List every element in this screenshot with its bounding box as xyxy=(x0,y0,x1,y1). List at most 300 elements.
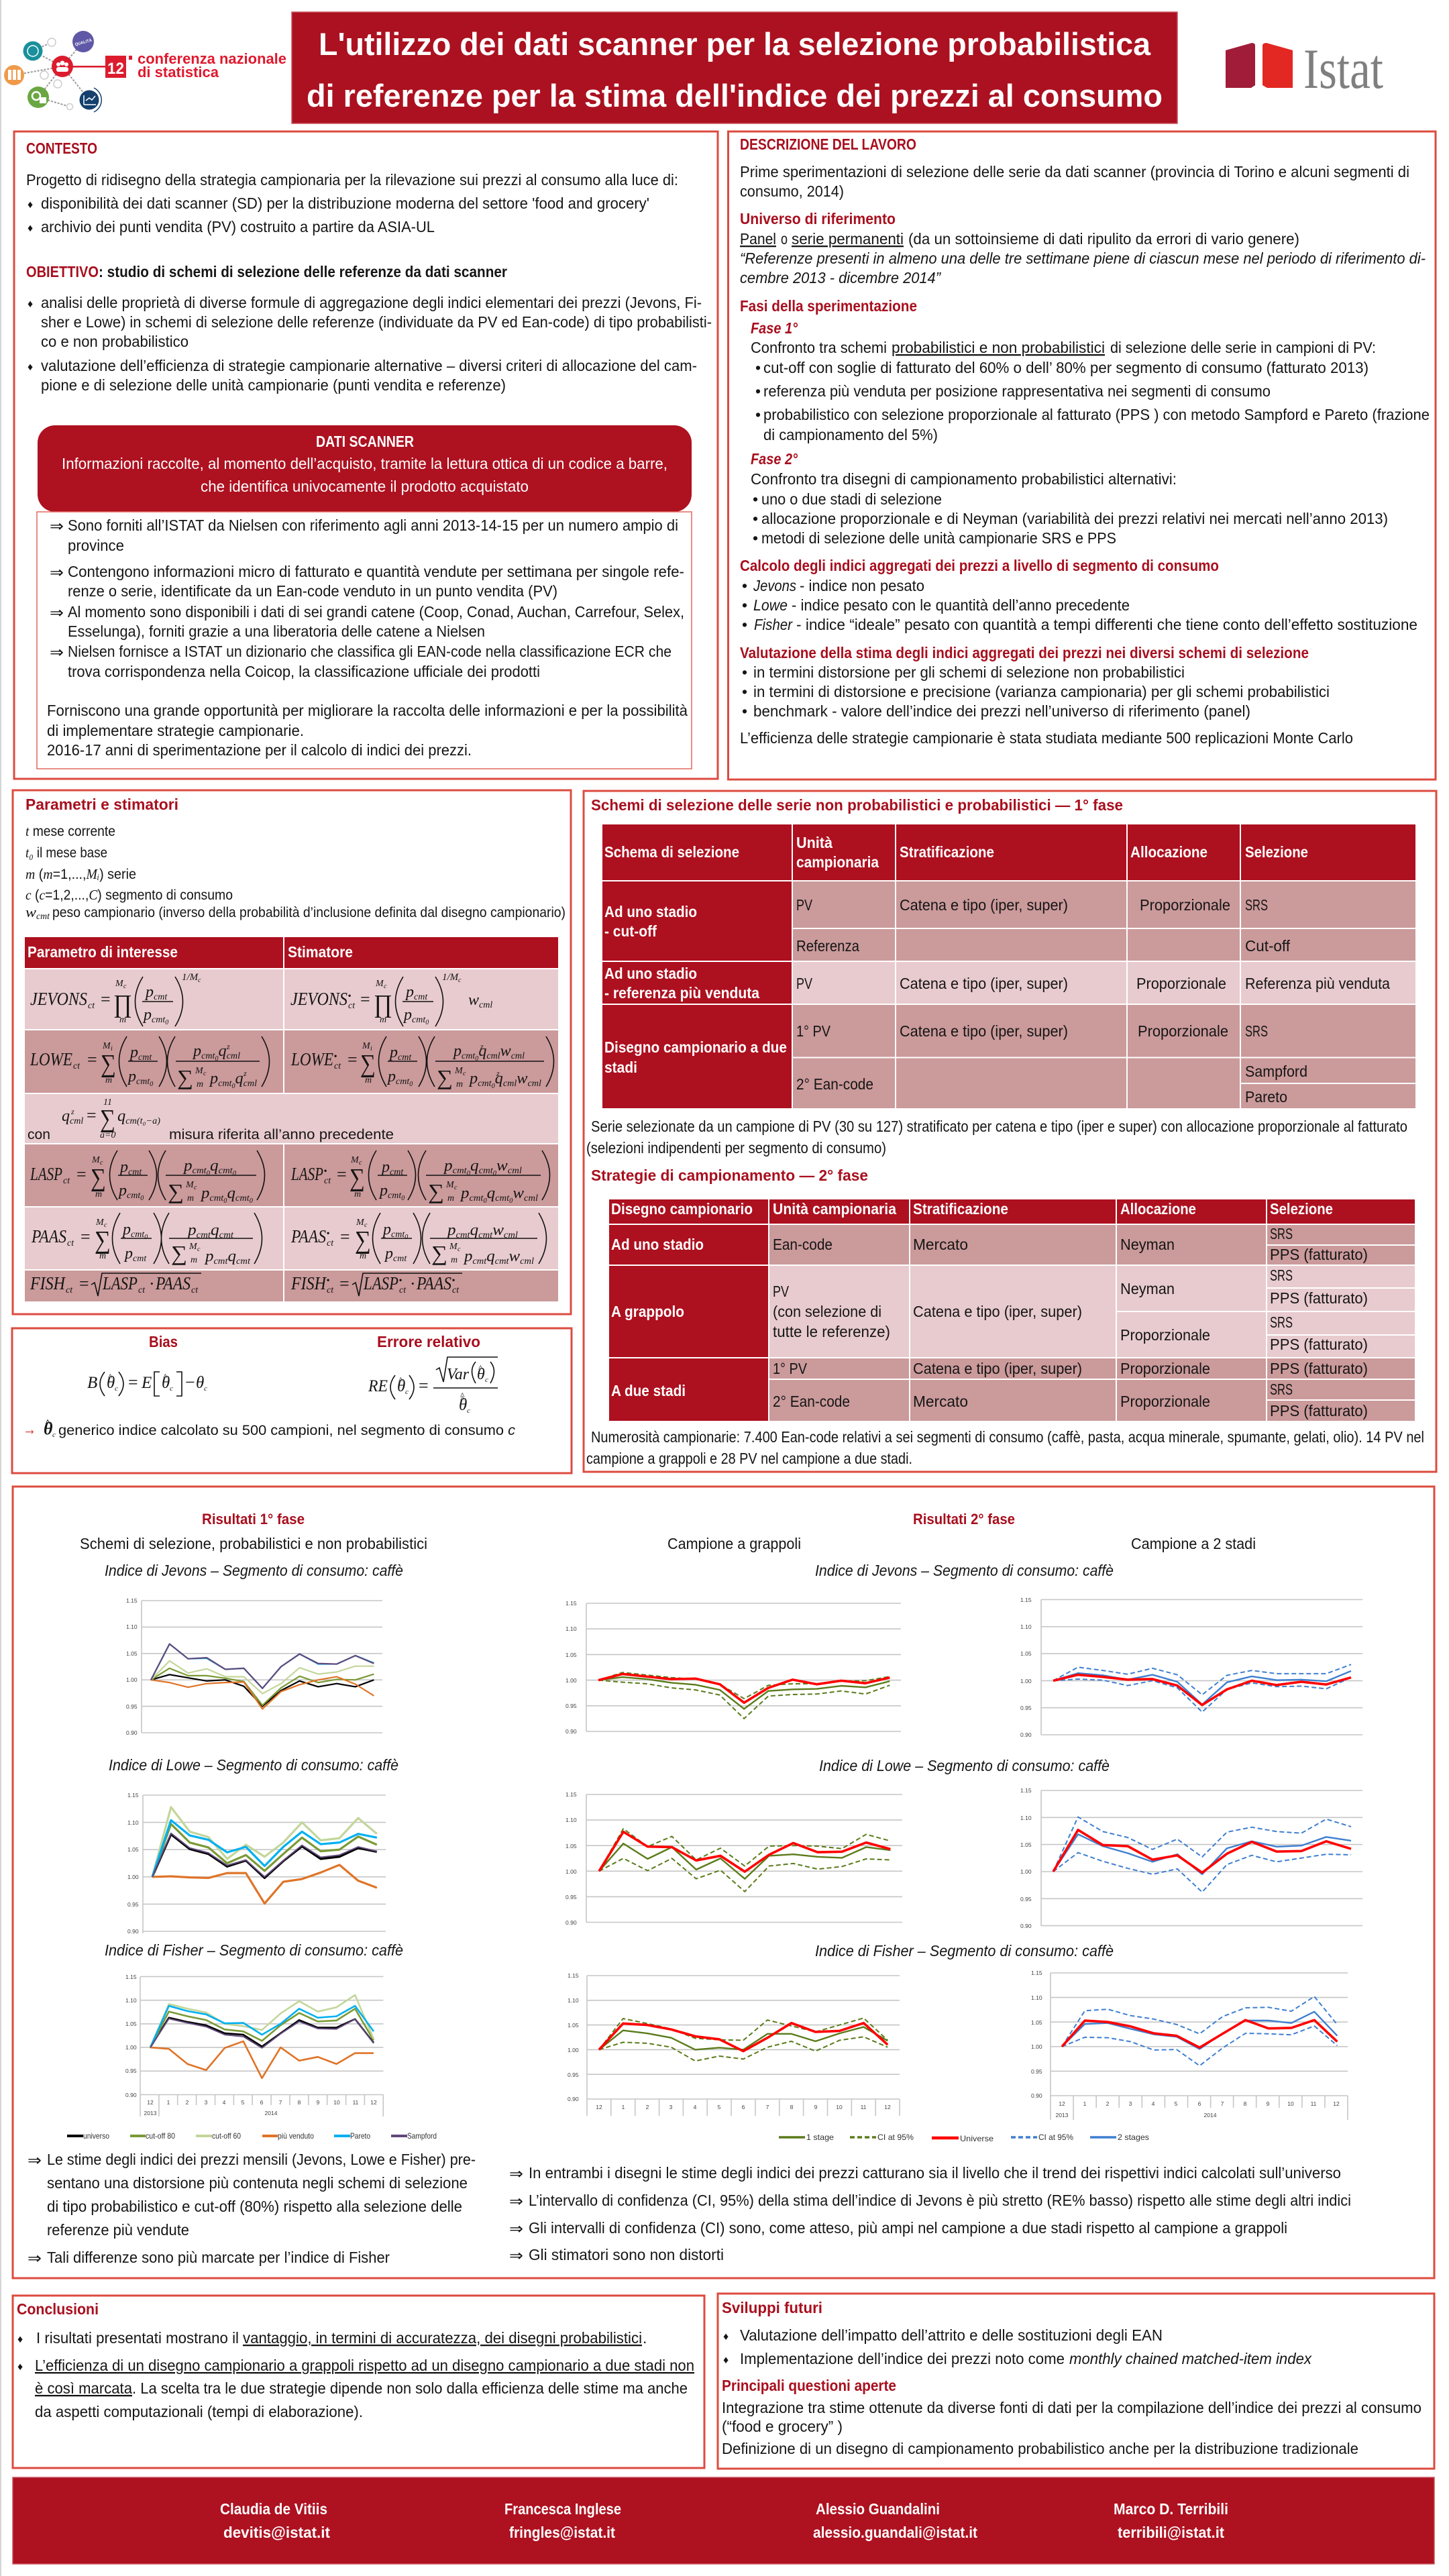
logo: conferenza nazionale di statistica: conferenza nazionale xyxy=(138,50,286,67)
title banner: L'utilizzo dei dati scanner per la selezione probabilistica xyxy=(319,26,1151,62)
formula: Paasche parameter: p xyxy=(188,1222,196,1239)
formula: Jevons parameter xyxy=(30,972,201,1026)
heading: universo: Universo di riferimento xyxy=(740,210,896,227)
formula: Laspeyres parameter: = xyxy=(76,1165,87,1184)
formula: q cumulated quantity note: 11 xyxy=(103,1097,112,1108)
formula: Paasche parameter: c xyxy=(197,1246,201,1253)
table: schemi di selezione: Catena e tipo (iper, super) xyxy=(900,1022,1068,1040)
table: schemi di selezione: PV xyxy=(796,896,813,914)
table: strategie di campionamento: Allocazione xyxy=(1120,1200,1196,1218)
formula: bias: ^ xyxy=(108,1373,113,1383)
line chart: Jevons grappoli: 0.95 xyxy=(566,1703,577,1709)
formula: bias: c xyxy=(115,1385,118,1393)
formula: bias: θ xyxy=(196,1374,204,1392)
formula: Laspeyres parameter: cmt xyxy=(127,1191,141,1201)
formula: q cumulated quantity note: q xyxy=(62,1108,70,1125)
formula: Fisher parameter: · xyxy=(149,1274,155,1293)
formula: Jevons estimator: JEVONS xyxy=(290,989,347,1009)
legend: fase 2: Universe xyxy=(960,2134,994,2143)
line chart: Fisher 2 stadi: 11 xyxy=(1311,2100,1317,2107)
text block: risultati 1 fase: sentano una distorsione più contenuta negli schemi di selezione xyxy=(47,2174,468,2192)
chart title: Fisher fase 1: Indice di Fisher – Segmento di consumo: caffè xyxy=(105,1941,403,1959)
text block: universo: (da un sottoinsieme di dati ripulito da errori di vario genere) xyxy=(908,230,1299,248)
formula: Jevons estimator: cml xyxy=(479,1000,492,1010)
formula: errore relativo: ^ xyxy=(478,1364,483,1374)
formula: Lowe estimator: 0 xyxy=(475,1055,478,1063)
table: strategie di campionamento: Neyman xyxy=(1120,1280,1175,1297)
table: strategie di campionamento: Proporzionale xyxy=(1120,1393,1210,1410)
author: Alessio Guandalini: alessio.guandali@istat.it xyxy=(813,2524,977,2541)
line chart: Jevons grappoli: 1.15 xyxy=(566,1600,577,1607)
formula: Jevons parameter: cmt xyxy=(152,1015,166,1025)
text block: progetto: Progetto di ridisegno della strategia campionaria per la rilevazione sui prezzi al consumo alla luce di: xyxy=(26,171,678,189)
formula: Paasche estimator: ∑ xyxy=(431,1241,447,1265)
formula: Lowe parameter: 0 xyxy=(150,1081,153,1088)
line chart: Fisher 2 stadi: 0.95 xyxy=(1031,2068,1042,2075)
formula: q cumulated quantity note: con xyxy=(28,1127,50,1142)
line chart: Jevons 2 stadi xyxy=(1020,1597,1362,1738)
formula: Laspeyres estimator: w xyxy=(513,1185,524,1202)
heading: principali questioni aperte: Principali questioni aperte xyxy=(722,2377,896,2394)
formula: Laspeyres parameter: M xyxy=(185,1180,195,1190)
table: schemi di selezione: Disegno campionario a due xyxy=(604,1038,787,1056)
heading: risultati 2 fase: Risultati 2° fase xyxy=(913,1511,1015,1527)
line chart: Fisher grappoli: 9 xyxy=(814,2104,818,2110)
text block: obiettivo: analisi delle proprietà di diverse formule di aggregazione degli indici elementari dei prezzi (Jevons, Fi- xyxy=(41,294,702,311)
formula: Lowe estimator xyxy=(290,1036,554,1090)
formula: Lowe parameter: p xyxy=(130,1044,138,1061)
formula: bias: θ xyxy=(107,1374,115,1392)
legend: fase 1: Sampford xyxy=(407,2131,437,2141)
formula: Laspeyres estimator: p xyxy=(444,1157,452,1175)
formula: Laspeyres parameter: 0 xyxy=(223,1197,227,1205)
formula: Jevons estimator: c xyxy=(384,983,387,990)
line chart: Jevons grappoli xyxy=(566,1600,901,1735)
text block: fase 1: • xyxy=(755,359,761,376)
formula: Jevons estimator xyxy=(290,972,492,1026)
formula: Lowe parameter: = xyxy=(87,1050,97,1069)
text block: risultati 2 fase xyxy=(509,2164,1351,2264)
title banner xyxy=(292,12,1177,123)
formula: Lowe estimator: • xyxy=(334,1051,337,1061)
heading: sviluppi futuri: Sviluppi futuri xyxy=(722,2299,822,2316)
line chart: Fisher fase 1: 4 xyxy=(223,2099,226,2106)
formula: Lowe estimator: w xyxy=(517,1070,528,1087)
panel: descrizione del lavoro xyxy=(729,131,1436,780)
text block: fase 1: cut-off con soglie di fatturato del 60% o dell’ 80% per segmento di consumo (fatturato 2013) xyxy=(763,359,1368,376)
formula: Lowe estimator: 0 xyxy=(409,1081,413,1088)
text block: dati scanner details: Al momento sono disponibili i dati di sei grandi catene (Coop, Conad, Auchan, Carrefour, Selex, xyxy=(68,603,684,621)
line chart: Fisher fase 1: 11 xyxy=(353,2099,359,2106)
line chart: Lowe grappoli: 0.95 xyxy=(566,1894,577,1900)
line chart: Jevons grappoli: 1.10 xyxy=(566,1625,577,1632)
formula: Jevons parameter: c xyxy=(198,977,201,984)
formula: Laspeyres estimator: cmt xyxy=(453,1166,468,1176)
formula: Paasche parameter xyxy=(31,1213,262,1267)
text block: notation: m (m=1,...,Mᵢ) serie xyxy=(25,866,136,882)
table: strategie di campionamento: PPS (fatturato) xyxy=(1270,1289,1368,1307)
formula: Fisher estimator: • xyxy=(452,1275,455,1285)
formula: Lowe parameter: q xyxy=(235,1070,244,1087)
text block: prime sperimentazioni: Prime sperimentazioni di selezione delle serie da dati scanner (provincia di Torino e alcuni segmenti di xyxy=(740,163,1409,180)
heading: descrizione: DESCRIZIONE DEL LAVORO xyxy=(740,136,916,153)
text block: dati scanner details: trova corrispondenza nella Coicop, la classificazione ufficiale dei prodotti xyxy=(68,663,540,680)
logo: conferenza nazionale di statistica: QUALITÀ xyxy=(74,38,93,47)
formula: Lowe estimator: q xyxy=(495,1070,503,1087)
chart title: Lowe fase 1: Indice di Lowe – Segmento di consumo: caffè xyxy=(109,1756,398,1774)
formula: Lowe parameter: M xyxy=(102,1041,111,1051)
formula: Lowe parameter: cmt xyxy=(136,1077,150,1087)
table: strategie di campionamento: PV xyxy=(773,1283,790,1300)
formula: Jevons estimator: = xyxy=(360,989,370,1009)
formula: Lowe parameter: p xyxy=(128,1068,136,1085)
table: schemi di selezione: Ad uno stadio xyxy=(604,965,697,982)
formula: errore relativo: Var xyxy=(447,1366,470,1383)
note: numerosità campionarie xyxy=(586,1428,1424,1467)
line chart: Lowe 2 stadi: 0.90 xyxy=(1020,1923,1032,1929)
panel: contesto xyxy=(14,131,718,779)
formula: errore relativo: = xyxy=(419,1376,429,1395)
formula: Paasche parameter: m xyxy=(191,1255,197,1265)
subheading: campione a 2 stadi: Campione a 2 stadi xyxy=(1131,1535,1256,1552)
title banner: di referenze per la stima dell'indice dei prezzi al consumo xyxy=(307,78,1163,113)
formula: Laspeyres parameter: ∑ xyxy=(168,1179,184,1203)
formula: Laspeyres parameter: m xyxy=(187,1193,194,1203)
line chart: Fisher grappoli: 0.95 xyxy=(568,2072,579,2078)
text block: progetto: ♦ xyxy=(28,199,33,211)
formula: Laspeyres estimator: ∑ xyxy=(428,1179,444,1203)
formula: Lowe estimator: 0 xyxy=(492,1083,495,1090)
text block: notation: c (c=1,2,...,C) segmento di consumo xyxy=(25,887,233,903)
text block: progetto: ♦ xyxy=(28,223,33,234)
text block: questioni aperte xyxy=(722,2399,1421,2457)
line chart: Fisher 2 stadi: 10 xyxy=(1287,2100,1294,2107)
line chart: Fisher 2 stadi: 7 xyxy=(1221,2100,1224,2107)
legend: fase 2: 2 stages xyxy=(1118,2133,1149,2142)
line chart: Fisher 2 stadi: 1 xyxy=(1083,2100,1087,2107)
formula: Paasche estimator: ∑ xyxy=(355,1226,371,1254)
text block: universo: serie permanenti xyxy=(792,230,904,248)
text block: universo: cembre 2013 - dicembre 2014” xyxy=(740,269,941,286)
text block: fase 2: • xyxy=(753,529,758,547)
formula: Paasche estimator: p xyxy=(383,1221,391,1238)
table: parametri e stimatori xyxy=(24,936,559,1302)
text block: obiettivo: pione e di selezione delle unità campionarie (punti vendita e referenze) xyxy=(41,376,506,394)
line chart: Fisher 2 stadi: 12 xyxy=(1333,2100,1340,2107)
text block: risultati 2 fase: ⇒ xyxy=(509,2247,523,2264)
note: generico indice: c xyxy=(52,1431,56,1439)
formula: Paasche estimator: M xyxy=(449,1242,458,1252)
table: strategie di campionamento: SRS xyxy=(1270,1381,1293,1398)
text block: sviluppi: Valutazione dell’impatto dell’attrito e delle sostituzioni degli EAN xyxy=(740,2326,1163,2344)
table: strategie di campionamento: Catena e tipo (iper, super) xyxy=(913,1360,1082,1377)
formula: Laspeyres estimator: M xyxy=(445,1180,455,1190)
formula: Laspeyres estimator: ct xyxy=(324,1176,331,1186)
text block: fase 2: Confronto tra disegni di campionamento probabilistici alternativi: xyxy=(751,470,1177,488)
formula: Laspeyres estimator: q xyxy=(487,1185,495,1202)
text block: risultati 2 fase: ⇒ xyxy=(509,2165,523,2182)
table: schemi di selezione: Selezione xyxy=(1245,843,1308,861)
text block: fase 1: Confronto tra schemi xyxy=(751,339,887,356)
text block: obiettivo: co e non probabilistico xyxy=(41,333,189,350)
formula: Paasche estimator: • xyxy=(327,1228,329,1238)
formula: errore relativo: θ xyxy=(397,1377,405,1395)
line chart: Fisher fase 1: 2 xyxy=(186,2099,189,2106)
formula: Paasche parameter: c xyxy=(104,1222,107,1229)
heading: strategie 2 fase: Strategie di campionamento — 2° fase xyxy=(591,1167,868,1184)
logo: conferenza nazionale di statistica: 12 xyxy=(107,60,124,78)
formula: Jevons parameter: cmt xyxy=(154,992,168,1002)
line chart: Lowe fase 1: 0.90 xyxy=(127,1928,139,1935)
note: serie selezionate xyxy=(586,1118,1407,1157)
legend: fase 1: cut-off 60 xyxy=(212,2131,241,2141)
line chart: Fisher 2 stadi: 1.10 xyxy=(1031,1994,1042,2001)
formula: Fisher estimator: • xyxy=(399,1275,402,1285)
formula: Paasche estimator: PAAS xyxy=(290,1226,326,1246)
text block: fase 1: di selezione delle serie in campioni di PV: xyxy=(1110,339,1376,356)
formula: Jevons estimator: cmt xyxy=(412,1015,426,1025)
formula: Jevons parameter: m xyxy=(119,1015,126,1025)
formula: Lowe estimator: p xyxy=(388,1068,396,1085)
table: schemi di selezione: Catena e tipo (iper, super) xyxy=(900,896,1068,914)
formula: errore relativo xyxy=(368,1357,498,1415)
formula: Jevons parameter: c xyxy=(123,983,127,990)
formula: Laspeyres parameter: LASP xyxy=(30,1164,62,1184)
formula: Paasche estimator: q xyxy=(486,1248,495,1265)
formula: Jevons estimator: p xyxy=(406,983,414,1001)
table: schemi di selezione: 2° Ean-code xyxy=(796,1075,873,1093)
table: schemi di selezione: Schema di selezione xyxy=(604,843,739,861)
formula: Lowe estimator: ∑ xyxy=(437,1065,453,1089)
formula: Paasche estimator: ct xyxy=(327,1238,334,1248)
table: strategie di campionamento: Ean-code xyxy=(773,1236,833,1253)
table: strategie di campionamento: PPS (fatturato) xyxy=(1270,1246,1368,1263)
table: strategie di campionamento: Unità campionaria xyxy=(773,1200,896,1218)
line chart: Lowe 2 stadi xyxy=(1020,1787,1362,1929)
formula: Laspeyres estimator: 0 xyxy=(467,1170,470,1177)
line chart: Jevons 2 stadi: 0.90 xyxy=(1020,1731,1032,1738)
text block: conclusioni: I risultati presentati mostrano il xyxy=(36,2329,239,2347)
table: strategie di campionamento: tutte le referenze) xyxy=(773,1323,890,1340)
line chart: Jevons 2 stadi: 1.10 xyxy=(1020,1623,1032,1630)
formula: Fisher estimator: FISH xyxy=(290,1273,327,1293)
line chart: Lowe fase 1: 1.15 xyxy=(127,1792,139,1799)
formula: Paasche estimator: cml xyxy=(520,1256,534,1267)
formula: bias: c xyxy=(170,1385,173,1393)
text block: valutazione: in termini distorsione per gli schemi di selezione non probabilistici xyxy=(753,663,1185,681)
table: schemi di selezione: stadi xyxy=(604,1059,637,1076)
text block: calcolo: • xyxy=(742,577,747,594)
heading: errore relativo: Errore relativo xyxy=(377,1333,480,1350)
text block: conclusioni: da aspetti computazionali (tempi di elaborazione). xyxy=(35,2403,363,2420)
line chart: Jevons grappoli: 1.00 xyxy=(566,1677,577,1684)
formula: q cumulated quantity note xyxy=(28,1097,394,1142)
table: strategie di campionamento: Ad uno stadio xyxy=(611,1236,704,1253)
text block: notation: t mese corrente xyxy=(25,823,115,839)
table: strategie di campionamento: SRS xyxy=(1270,1225,1293,1242)
heading: obiettivo: : studio di schemi di selezione delle referenze da dati scanner xyxy=(99,263,507,280)
formula: Paasche estimator: w xyxy=(492,1222,504,1239)
heading: fasi: Fasi della sperimentazione xyxy=(740,297,917,315)
line chart: Fisher grappoli: 1.10 xyxy=(568,1997,579,2004)
table: schemi di selezione: Proporzionale xyxy=(1136,975,1226,992)
formula: Lowe parameter: c xyxy=(203,1070,207,1077)
formula: Fisher estimator: = xyxy=(339,1274,350,1293)
author: Marco D. Terribili: terribili@istat.it xyxy=(1118,2524,1224,2541)
formula: Jevons estimator: M xyxy=(375,979,384,989)
table: schemi di selezione: Ad uno stadio xyxy=(604,903,697,920)
line chart: Jevons 2 stadi: 0.95 xyxy=(1020,1705,1032,1711)
formula: bias: = xyxy=(128,1373,138,1392)
text block: dati scanner details: ⇒ xyxy=(50,564,64,581)
text block: calcolo: - indice non pesato xyxy=(800,577,924,594)
line chart: Fisher 2 stadi: 6 xyxy=(1198,2100,1201,2107)
footer: authors xyxy=(13,2477,1434,2564)
formula: Laspeyres parameter: p xyxy=(201,1185,209,1202)
formula: bias: B xyxy=(87,1374,97,1392)
line chart: Fisher fase 1: 12 xyxy=(147,2099,154,2106)
table: strategie di campionamento: Mercato xyxy=(913,1393,968,1410)
table: parametri e stimatori: Parametro di interesse xyxy=(28,943,178,961)
formula: Fisher estimator: LASP xyxy=(363,1273,398,1293)
formula: Laspeyres estimator: = xyxy=(337,1165,347,1184)
formula: q cumulated quantity note: z xyxy=(70,1107,74,1116)
formula: Paasche parameter: q xyxy=(211,1222,219,1239)
author: Alessio Guandalini xyxy=(813,2500,977,2541)
formula: Lowe parameter: i xyxy=(111,1045,113,1053)
text block: conclusioni: . La scelta tra le due strategie dipende non solo dalla efficienza delle stime ma anche xyxy=(132,2379,688,2397)
line chart: Fisher fase 1: 2013 xyxy=(144,2110,157,2116)
formula: Laspeyres estimator: cmt xyxy=(469,1193,484,1203)
formula: Jevons estimator: ∏ xyxy=(374,990,392,1018)
text block: risultati 1 fase: Le stime degli indici dei prezzi mensili (Jevons, Lowe e Fisher) pre- xyxy=(47,2151,476,2168)
line chart: Fisher fase 1: 0.95 xyxy=(125,2068,137,2074)
line chart: Fisher fase 1: 1.15 xyxy=(125,1974,137,1980)
text block: calcolo xyxy=(742,577,1417,633)
table: schemi di selezione: campionaria xyxy=(796,853,879,871)
formula: Laspeyres estimator: cmt xyxy=(495,1193,510,1203)
text block: conclusioni: L’efficienza di un disegno campionario a grappoli rispetto ad un disegno campionario a due stadi non xyxy=(35,2357,694,2374)
formula: Lowe estimator: p xyxy=(453,1042,462,1060)
formula: Laspeyres estimator: cmt xyxy=(479,1166,494,1176)
formula: Lowe estimator: M xyxy=(454,1066,464,1076)
formula: Laspeyres estimator: cmt xyxy=(388,1191,402,1201)
logo: conferenza nazionale di statistica xyxy=(4,31,286,112)
line chart: Fisher fase 1: 7 xyxy=(279,2099,282,2106)
line chart: Lowe 2 stadi: 1.15 xyxy=(1020,1787,1032,1794)
formula: Laspeyres parameter: M xyxy=(91,1155,101,1165)
formula: Fisher estimator: ct xyxy=(327,1285,334,1295)
formula: Lowe parameter: z xyxy=(226,1042,230,1051)
text block: risultati 2 fase: ⇒ xyxy=(509,2220,523,2237)
line chart: Fisher fase 1: 3 xyxy=(205,2099,208,2106)
formula: Laspeyres parameter: q xyxy=(227,1185,235,1202)
formula: Lowe parameter: 0 xyxy=(231,1083,235,1090)
table: strategie di campionamento: (con selezione di xyxy=(773,1303,881,1320)
text block: risultati 1 fase: Tali differenze sono più marcate per l’indice di Fisher xyxy=(47,2249,390,2266)
formula: Jevons parameter: p xyxy=(144,1006,152,1024)
legend: fase 1: cut-off 80 xyxy=(146,2131,175,2141)
text block: valutazione: benchmark - valore dell’indice dei prezzi nell’universo di riferimento (panel) xyxy=(753,702,1250,720)
formula: Paasche parameter: cmt xyxy=(131,1230,145,1240)
formula: Lowe estimator: i xyxy=(370,1045,372,1053)
formula: Laspeyres parameter: ∑ xyxy=(91,1164,106,1192)
formula: Laspeyres parameter: p xyxy=(120,1159,128,1176)
heading: obiettivo: OBIETTIVO xyxy=(26,263,99,280)
callout: dati scanner: Informazioni raccolte, al momento dell’acquisto, tramite la lettura ottica di un codice a barre, xyxy=(62,455,667,472)
formula: Paasche parameter: M xyxy=(189,1242,198,1252)
formula: Laspeyres estimator: m xyxy=(447,1193,454,1203)
formula: q cumulated quantity note: cm(t₀−a) xyxy=(125,1116,160,1126)
table: schemi di selezione: Allocazione xyxy=(1130,843,1208,861)
formula: Fisher parameter: ct xyxy=(191,1285,199,1295)
line chart: Fisher 2 stadi: 1.00 xyxy=(1031,2043,1042,2050)
text block: risultati 1 fase xyxy=(28,2151,476,2267)
text block: dati scanner details: renze o serie, identificate da un Ean-code venduto in un punto vendita (PV) xyxy=(68,582,557,600)
table: strategie di campionamento: SRS xyxy=(1270,1267,1293,1284)
legend: fase 1: più venduto xyxy=(278,2131,314,2141)
text block: calcolo: - indice “ideale” pesato con quantità a tempi differenti che tiene conto dell’effetto sostituzione xyxy=(796,616,1417,633)
formula: Laspeyres estimator: 0 xyxy=(483,1197,487,1205)
line chart: Jevons fase 1: 1.10 xyxy=(126,1623,138,1630)
formula: bias: c xyxy=(204,1385,207,1393)
author: Marco D. Terribili: Marco D. Terribili xyxy=(1114,2500,1228,2518)
line chart: Lowe fase 1: 1.05 xyxy=(127,1846,139,1853)
line chart: Fisher 2 stadi: 5 xyxy=(1175,2100,1178,2107)
line chart: Jevons grappoli: 1.05 xyxy=(566,1652,577,1658)
formula: Laspeyres parameter: cmt xyxy=(235,1193,250,1203)
text block: risultati 1 fase: ⇒ xyxy=(28,2151,42,2169)
table: strategie di campionamento: PPS (fatturato) xyxy=(1270,1336,1368,1353)
text block: obiettivo: ♦ xyxy=(28,299,33,310)
line chart: Lowe grappoli: 1.10 xyxy=(566,1817,577,1823)
formula: Lowe estimator: p xyxy=(470,1070,478,1087)
line chart: Lowe 2 stadi: 1.00 xyxy=(1020,1868,1032,1875)
formula: Lowe estimator: LOWE xyxy=(290,1049,333,1069)
formula: Paasche parameter: cmt xyxy=(213,1256,229,1267)
chart title: Lowe fase 2: Indice di Lowe – Segmento di consumo: caffè xyxy=(819,1757,1110,1774)
panel: sviluppi futuri xyxy=(718,2294,1434,2469)
formula: Jevons estimator: 1/M xyxy=(442,972,460,983)
formula: Lowe parameter: p xyxy=(210,1070,218,1087)
line chart: Jevons grappoli: 0.90 xyxy=(566,1728,577,1735)
formula: Lowe parameter xyxy=(30,1036,270,1090)
text block: valutazione: • xyxy=(742,683,747,700)
text block: valutazione: • xyxy=(742,663,747,681)
formula: Jevons estimator: w xyxy=(468,991,479,1009)
table: schemi di selezione: Referenza xyxy=(796,937,859,955)
formula: Jevons parameter: 1/M xyxy=(182,972,199,983)
formula: q cumulated quantity note: cml xyxy=(70,1116,83,1126)
heading: valutazione: Valutazione della stima degli indici aggregati dei prezzi nei diversi schemi di selezione xyxy=(740,644,1309,661)
formula: Paasche estimator: cmt xyxy=(393,1254,407,1264)
line chart: Lowe 2 stadi: 0.95 xyxy=(1020,1896,1032,1902)
panel: risultati xyxy=(13,1487,1434,2278)
text block: calcolo: • xyxy=(742,616,747,633)
text block: valutazione: L’efficienza delle strategie campionarie è stata studiata mediante 500 replicazioni Monte Carlo xyxy=(740,729,1353,747)
text block: dati scanner details: ⇒ xyxy=(50,643,64,661)
text block: fase 2 xyxy=(751,450,1388,547)
text block: obiettivo xyxy=(28,294,712,394)
text block: risultati 2 fase: In entrambi i disegni le stime degli indici dei prezzi catturano sia il livello che il trend dei rispettivi indici calcolati sull’universo xyxy=(529,2164,1341,2182)
formula: Fisher parameter xyxy=(30,1273,201,1296)
formula: Lowe parameter: 0 xyxy=(215,1055,219,1063)
formula: Lowe parameter: cmt xyxy=(201,1051,216,1061)
text block: universo: o xyxy=(781,230,788,248)
table: schemi di selezione: Cut-off xyxy=(1245,937,1291,955)
table: strategie di campionamento: Proporzionale xyxy=(1120,1326,1210,1344)
formula: errore relativo: ^ xyxy=(460,1391,465,1401)
